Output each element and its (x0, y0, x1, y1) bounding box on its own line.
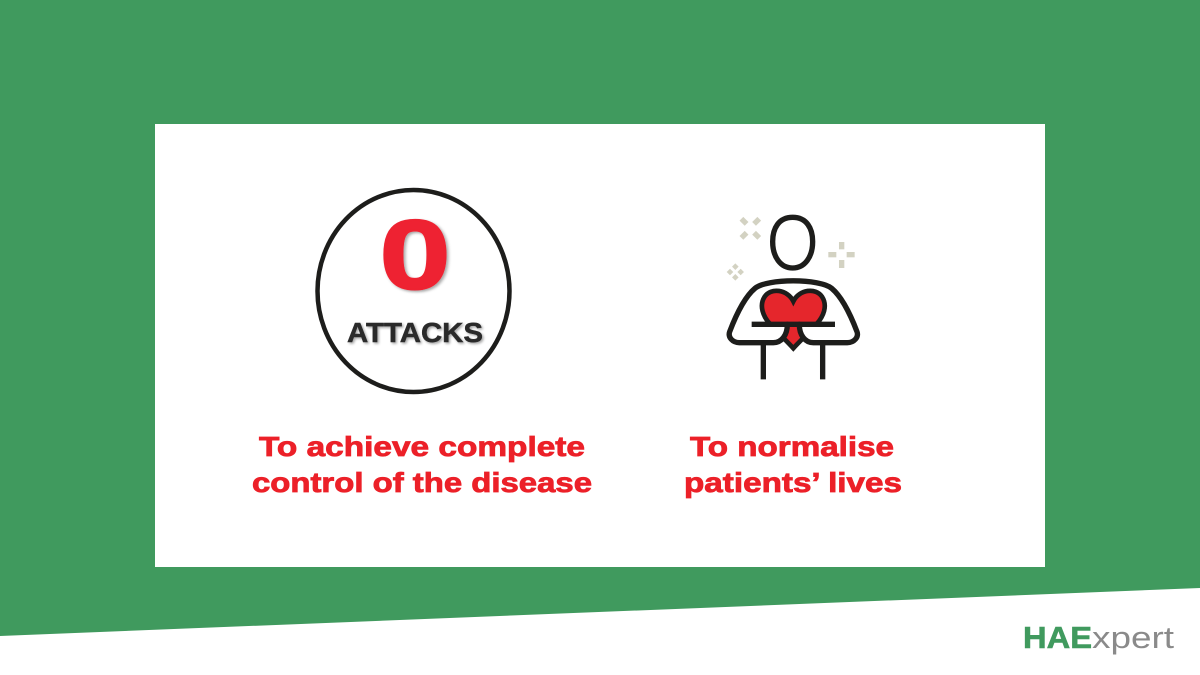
caption: normalise lives: To normalise (690, 431, 894, 462)
heart (762, 291, 825, 348)
attacks label: ATTACKS (347, 317, 483, 348)
legs (763, 343, 823, 379)
caption: complete control (252, 431, 592, 498)
caption: complete control: control of the disease (252, 467, 592, 498)
caption: complete control: To achieve complete (259, 431, 585, 462)
big red zero: 0 (380, 201, 450, 310)
arms and shoulders (729, 281, 857, 343)
caption: normalise lives: patients’ lives (684, 467, 902, 498)
logo: HAExpert (1023, 620, 1174, 655)
icon: person holding heart (727, 217, 857, 379)
forearm line (752, 316, 835, 332)
logo: HAExpert: HAE (1023, 620, 1092, 655)
logo: HAExpert: xpert (1092, 620, 1174, 655)
caption: normalise lives (684, 431, 902, 498)
sparkles (727, 217, 855, 281)
icon: zero attacks badge (318, 190, 510, 392)
panel: white content card (155, 124, 1045, 567)
white slanted footer band (0, 588, 1200, 675)
hand patches covering heart (743, 324, 843, 343)
head (773, 217, 813, 268)
